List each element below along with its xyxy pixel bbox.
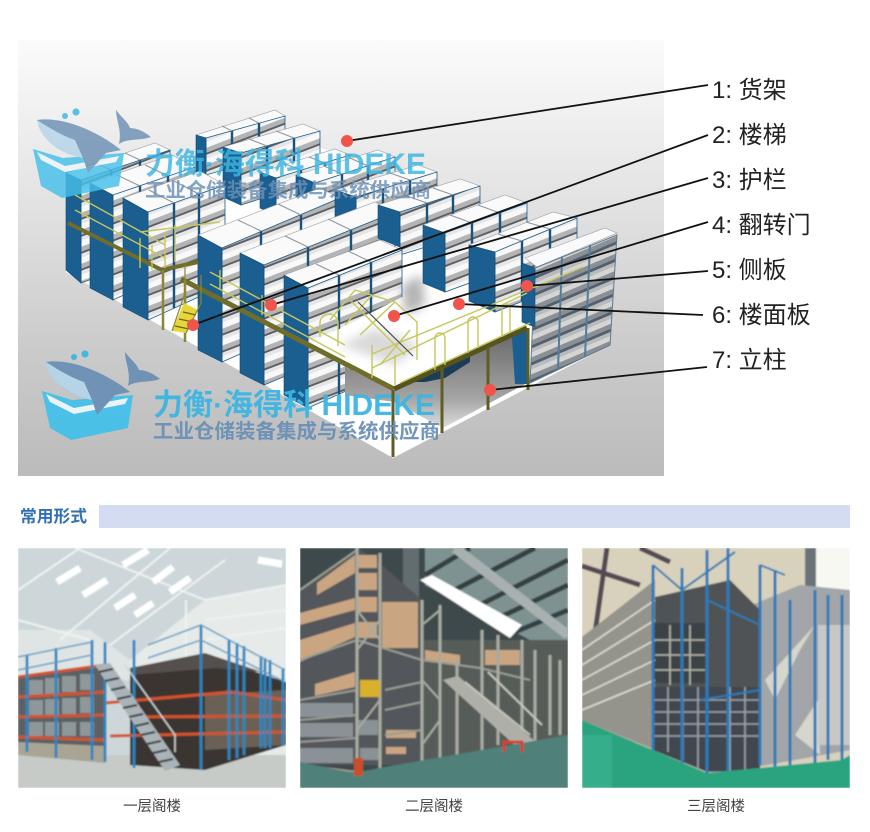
section heading: common forms [20, 505, 850, 528]
part labels: 6: 楼面板 [712, 302, 811, 329]
part labels [712, 77, 811, 374]
stairs [172, 265, 201, 333]
tagline: 工业仓储装备集成与系统供应商 [145, 178, 431, 202]
caption: two tier: 二层阁楼 [405, 798, 463, 815]
photo: three-tier mezzanine [582, 548, 850, 788]
callout leaders and markers [187, 85, 708, 396]
railings [75, 195, 583, 385]
mezzanine deck [308, 270, 527, 389]
part labels: 5: 侧板 [712, 257, 787, 284]
under-deck shadow [345, 330, 527, 428]
rear rows on deck [423, 195, 617, 383]
deck shadows [340, 275, 425, 365]
watermark logo: lower [42, 350, 440, 443]
whale and box icon [42, 350, 160, 440]
caption: single tier: 一层阁楼 [123, 798, 181, 815]
brand name: 力衡·海得科 HIDEKE [145, 148, 426, 181]
watermark logo: upper [33, 108, 431, 202]
part labels: 4: 翻转门 [712, 212, 811, 239]
whale and box icon [33, 108, 151, 198]
part labels: 1: 货架 [712, 77, 787, 104]
panel: mezzanine structure diagram [18, 40, 664, 476]
shelving rows [66, 110, 480, 408]
part labels: 2: 楼梯 [712, 122, 787, 149]
tagline: 工业仓储装备集成与系统供应商 [153, 419, 440, 443]
caption: three tier: 三层阁楼 [687, 798, 745, 815]
brand name: 力衡·海得科 HIDEKE [153, 389, 435, 422]
floor footprint [66, 135, 610, 458]
steel beams and posts [68, 223, 528, 457]
part labels: 3: 护栏 [712, 167, 787, 194]
photo: single-tier mezzanine [18, 548, 286, 788]
photo: two-tier mezzanine [300, 548, 568, 788]
part labels: 7: 立柱 [712, 347, 787, 374]
section heading: common forms: 常用形式 [20, 507, 87, 526]
